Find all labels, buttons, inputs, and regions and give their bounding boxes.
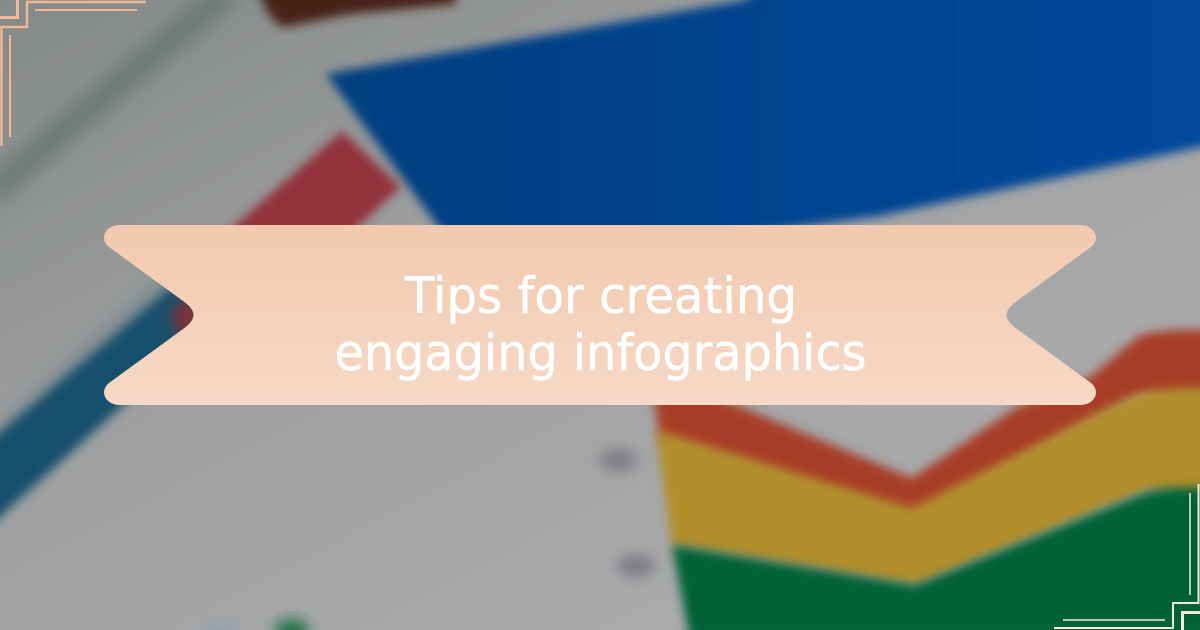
ribbon banner xyxy=(104,225,1096,405)
blurred teal stripe xyxy=(0,272,200,535)
blurred legend dots xyxy=(207,619,309,630)
blurred axis label smudges xyxy=(599,449,655,577)
blurred blue area xyxy=(326,0,1200,240)
blurred brown object xyxy=(258,0,456,27)
blurred dark red spot xyxy=(172,300,204,336)
bottom-right corner ornament xyxy=(1054,484,1200,630)
blurred green chart band xyxy=(672,488,1200,630)
blurred diagonal grey-green line xyxy=(0,0,230,195)
top-left corner ornament xyxy=(0,0,146,146)
blurred red chart band xyxy=(650,330,1200,520)
blurred teal stripe soft upper edge xyxy=(0,258,200,500)
title: Tips for creating xyxy=(404,267,797,325)
blurred red stripe xyxy=(225,131,401,252)
title: engaging infographics xyxy=(334,324,866,382)
blurred yellow chart band xyxy=(656,388,1200,585)
